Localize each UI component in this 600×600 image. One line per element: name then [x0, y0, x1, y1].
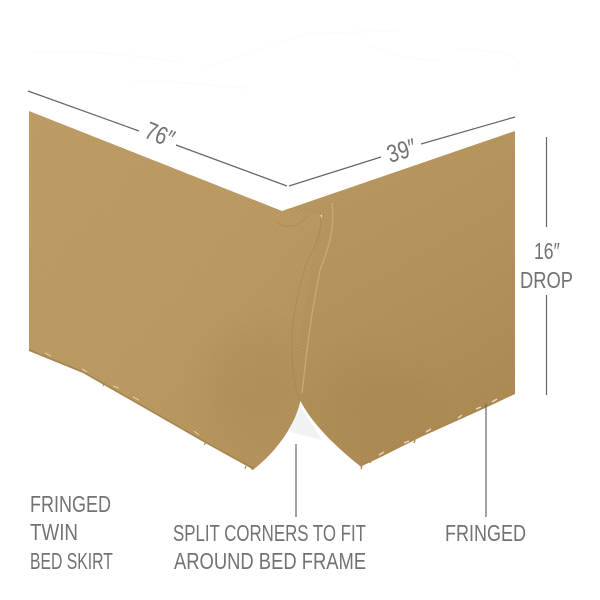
- panel: long side of bed skirt: [29, 111, 330, 469]
- infographic: bed skirt product diagram: [28, 90, 572, 569]
- dimension: 76 inch length: [28, 91, 287, 186]
- fringe: long side: [29, 350, 254, 470]
- mattress top: [30, 31, 518, 88]
- dimension: 39 inch width: 39″: [384, 133, 420, 168]
- product name label: FRINGED: [30, 492, 111, 518]
- product name label: [30, 492, 113, 575]
- fringe: short side: [360, 393, 515, 469]
- corner pleat: [276, 203, 333, 400]
- dimension: 76 inch length: 76″: [141, 117, 178, 153]
- shadow in split corner: [290, 402, 322, 440]
- product name label: BED SKIRT: [30, 549, 113, 575]
- panel: short side of bed skirt: [282, 131, 515, 466]
- dimension: 16 inch drop: DROP: [520, 268, 573, 294]
- callout: split corners: SPLIT CORNERS TO FIT: [173, 520, 366, 547]
- callout: split corners: AROUND BED FRAME: [174, 549, 366, 575]
- callout: split corners: [173, 444, 366, 575]
- callout: fringed: FRINGED: [445, 521, 526, 547]
- dimension: 16 inch drop: 16″: [534, 239, 560, 265]
- dimension: 39 inch width: [289, 117, 515, 186]
- dimension: 16 inch drop: [520, 137, 573, 395]
- product name label: TWIN: [30, 519, 78, 546]
